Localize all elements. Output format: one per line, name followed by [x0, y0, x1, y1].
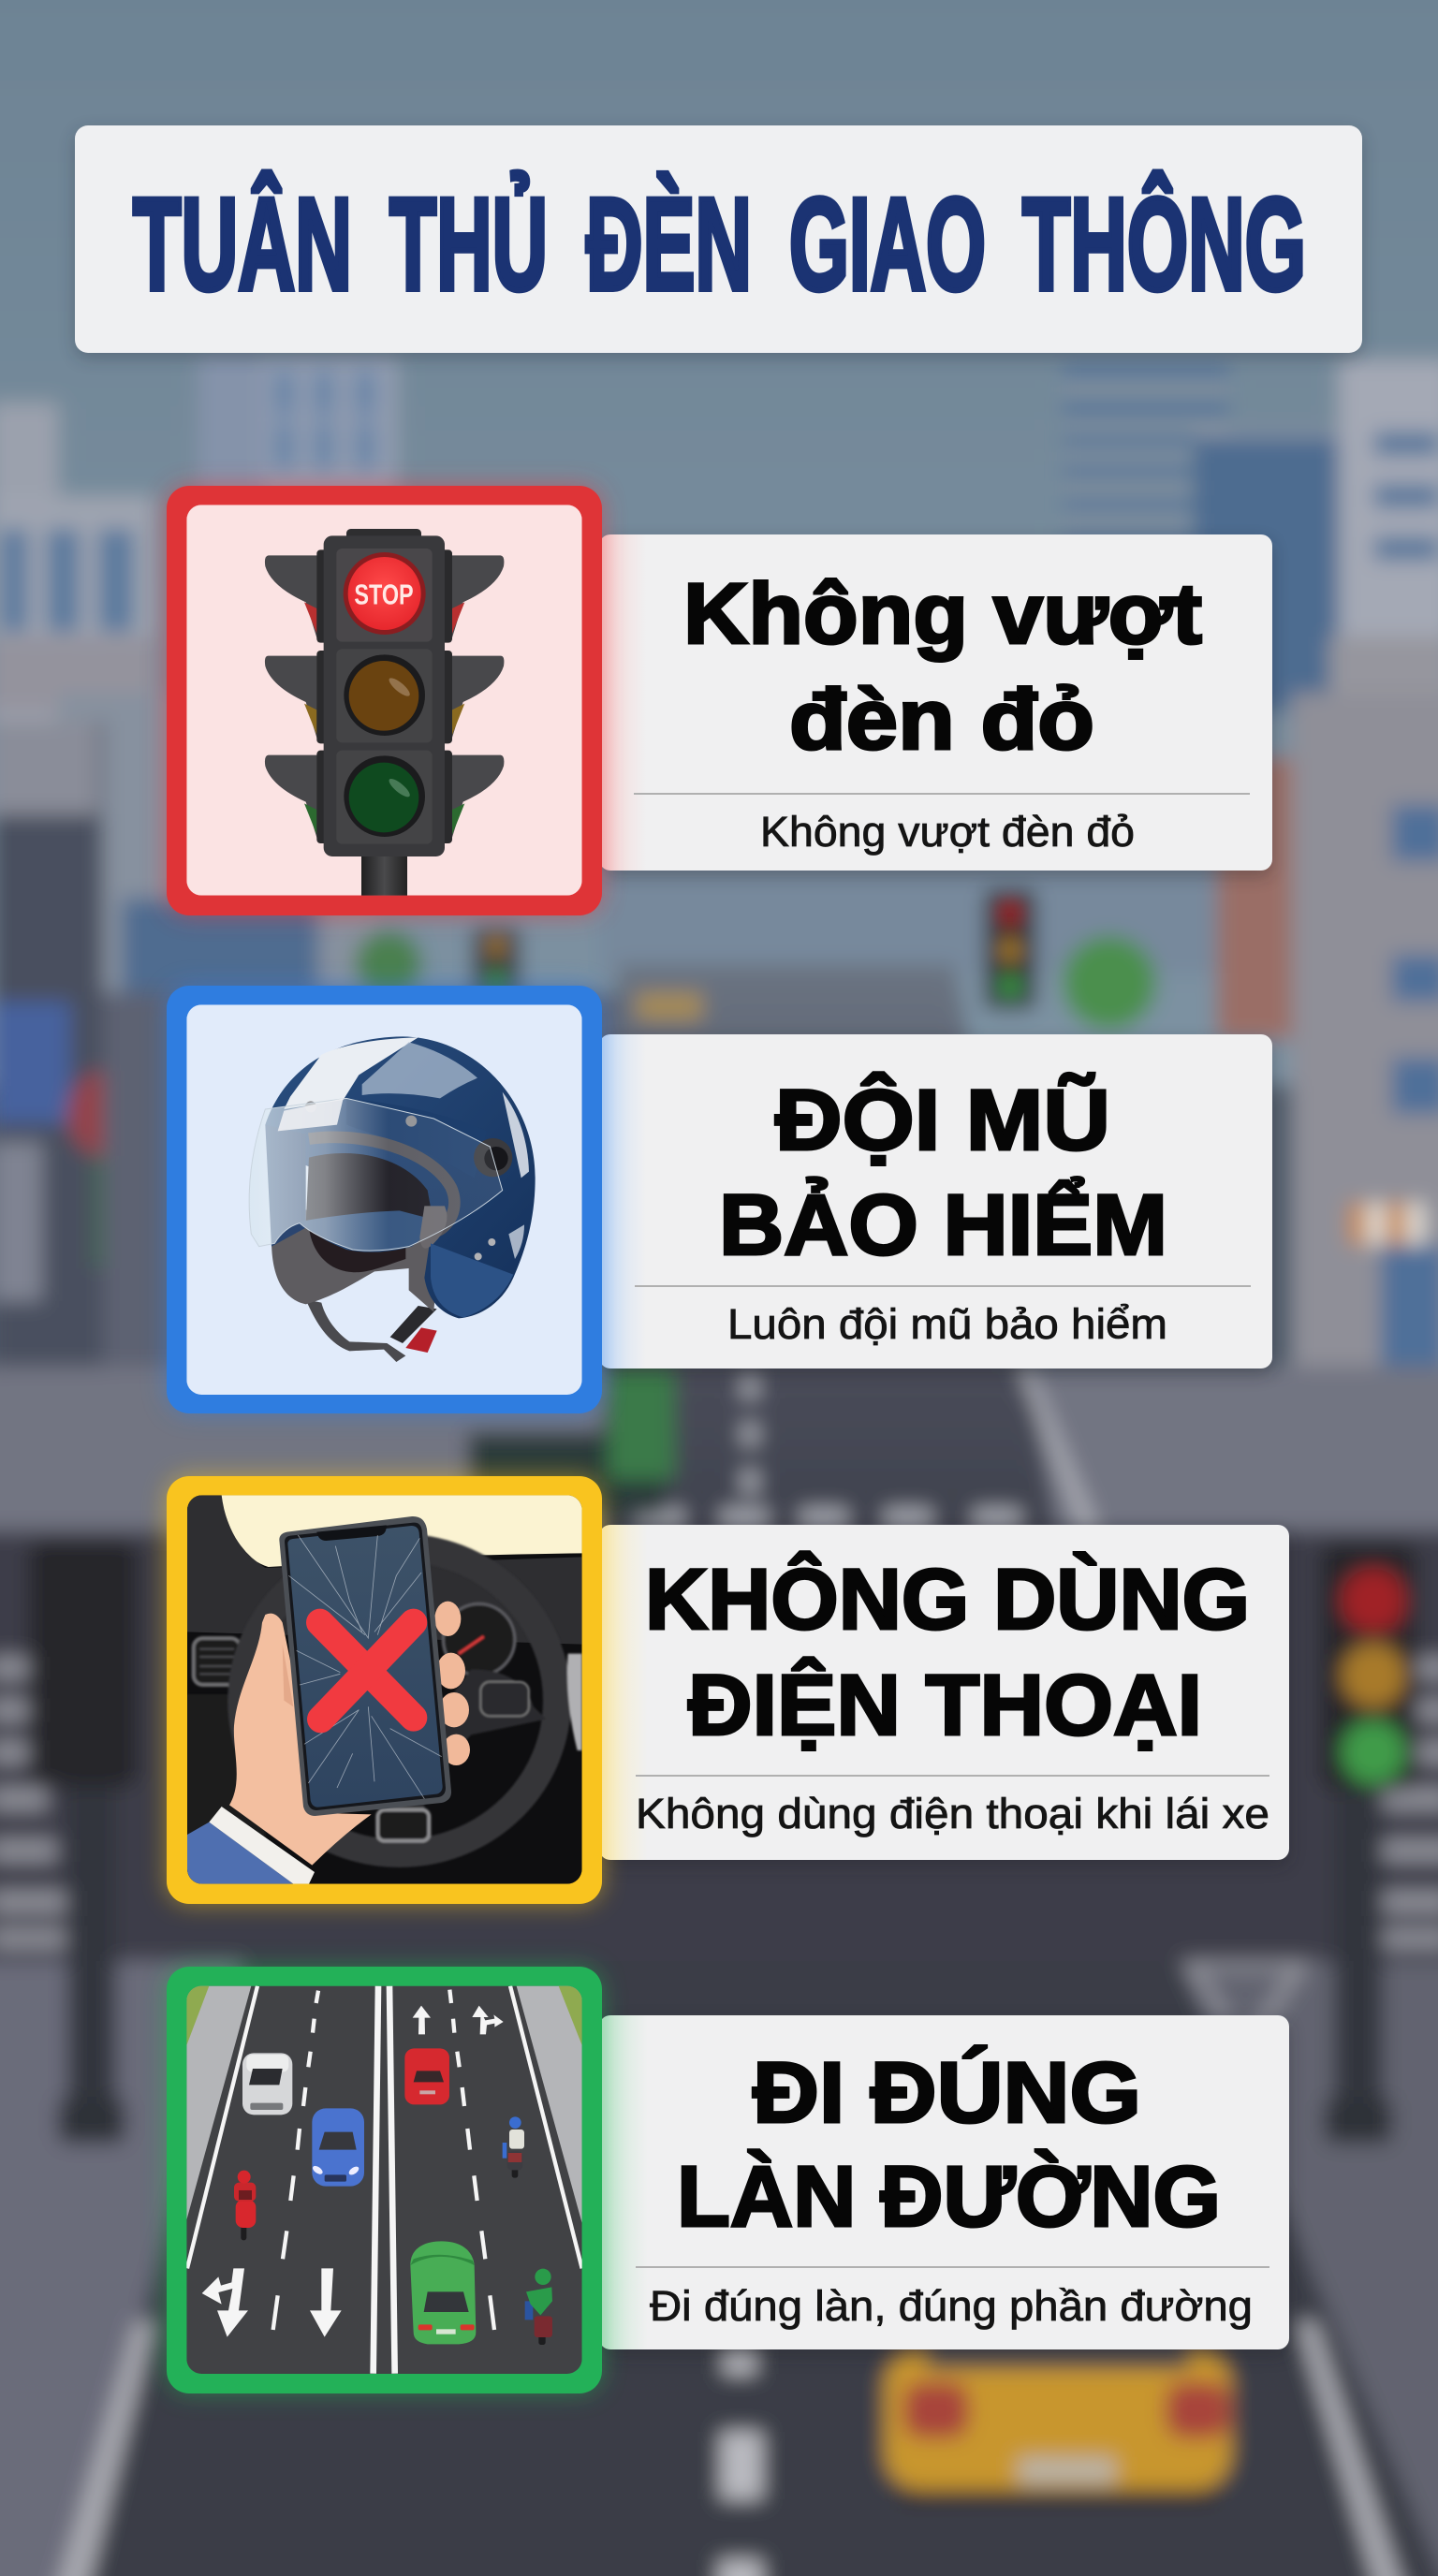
title text: THỦ — [389, 170, 548, 317]
icon: road lanes card — [167, 1967, 602, 2393]
background yellow car — [885, 2340, 1231, 2503]
rule 4 heading: ĐI ĐÚNG — [753, 2044, 1141, 2141]
helmet shell — [265, 1036, 536, 1318]
rule 3 panel: no phone — [167, 1476, 1289, 1904]
green rider motorbike — [525, 2269, 552, 2345]
rule 3 subtitle: Không dùng điện thoại khi lái xe — [636, 1790, 1269, 1837]
background tower right — [1063, 356, 1229, 880]
white car — [242, 2053, 292, 2115]
helmet liner — [271, 1209, 440, 1312]
background small traffic light — [985, 889, 1035, 1009]
helmet visor — [249, 1098, 503, 1251]
title panel — [75, 125, 1362, 359]
rule 1 heading — [683, 566, 1202, 768]
rule 3 heading — [645, 1551, 1250, 1753]
rule 4 heading: LÀN ĐƯỜNG — [677, 2148, 1221, 2245]
blue rider motorbike — [503, 2116, 524, 2178]
red car — [404, 2048, 449, 2104]
rule 2 heading: BẢO HIỂM — [719, 1176, 1167, 1273]
title text: GIAO — [789, 170, 986, 317]
green car — [410, 2241, 476, 2344]
rule 4 panel: correct lane — [167, 1967, 1289, 2393]
title text: ĐÈN — [586, 170, 752, 317]
rule 3 heading: ĐIỆN THOẠI — [688, 1657, 1202, 1753]
chin strap — [306, 1299, 437, 1362]
background tower left — [198, 356, 397, 730]
rule 1 heading: đèn đỏ — [789, 672, 1094, 768]
background lower road and sidewalks — [0, 1961, 1438, 2576]
background road — [0, 964, 1438, 1970]
title text: TUÂN — [133, 170, 352, 317]
background large traffic lights — [28, 1540, 1417, 2144]
background lower left buildings — [0, 693, 627, 1535]
rule 1 heading: Không vượt — [683, 566, 1202, 662]
icon: traffic light card — [167, 486, 602, 915]
rule 2 panel: wear helmet — [167, 986, 1272, 1413]
background middle blocks — [599, 693, 1438, 1498]
rule 2 heading: ĐỘI MŨ — [775, 1072, 1110, 1168]
rule 3 heading: KHÔNG DÙNG — [645, 1551, 1250, 1647]
rule 1 subtitle: Không vượt đèn đỏ — [760, 808, 1135, 856]
red motorbike — [234, 2171, 256, 2240]
background building far right — [1329, 360, 1438, 1105]
icon: phone at the wheel card — [167, 1476, 602, 1904]
icon: helmet card — [167, 986, 602, 1413]
background building left — [0, 402, 154, 721]
rule 1 panel: no red light — [167, 486, 1272, 915]
icon: traffic light card: STOP — [354, 578, 414, 610]
background glass building — [1194, 431, 1348, 711]
rule 2 subtitle: Luôn đội mũ bảo hiểm — [727, 1300, 1167, 1348]
blue car — [312, 2108, 364, 2187]
rule 4 subtitle: Đi đúng làn, đúng phần đường — [650, 2282, 1253, 2330]
background small traffic light behind card — [355, 927, 520, 1002]
background crosswalk stripes — [0, 1657, 1438, 1949]
rule 4 heading — [677, 2044, 1221, 2245]
rule 2 heading — [719, 1072, 1167, 1273]
